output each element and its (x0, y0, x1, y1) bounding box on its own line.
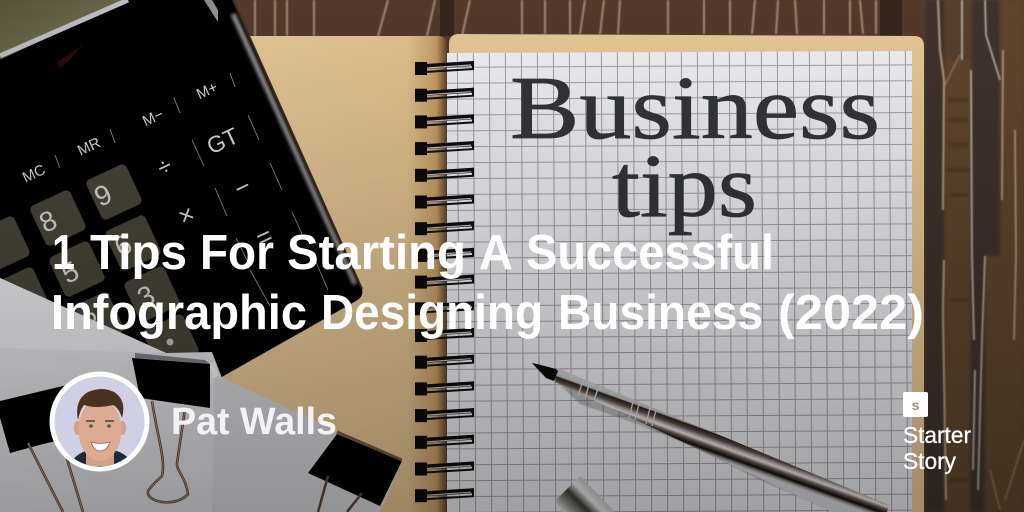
logo wordmark: Starter (903, 422, 971, 448)
calculator key legends: − (229, 170, 255, 204)
logo wordmark: Story (903, 448, 956, 474)
white paper sheets (0, 278, 402, 512)
binder clip: centre (132, 353, 210, 502)
calculator key legends: 9 (89, 178, 117, 213)
olive surface behind calculator (0, 0, 122, 54)
calculator key legends: GT (203, 122, 243, 159)
spiral binding (415, 61, 473, 502)
title: Starting (287, 226, 466, 280)
calculator keys (0, 163, 200, 371)
fountain pen (532, 363, 889, 512)
calculator key legends: 6 (109, 228, 137, 263)
right wooden notebook cover (449, 34, 924, 512)
calculator key legends: 5 (56, 255, 84, 290)
binder clip: right (308, 432, 402, 512)
title: Tips (90, 226, 187, 280)
logo wordmark (903, 422, 971, 474)
calculator key legends: × (173, 198, 199, 232)
title: For (200, 226, 274, 280)
calculator key legends: ÷ (153, 152, 177, 182)
calculator key legends: M+ (194, 79, 221, 103)
author avatar (50, 372, 150, 472)
title: Successful (526, 226, 774, 280)
calculator key legends: M− (140, 106, 167, 130)
printed heading on notebook (510, 59, 880, 236)
calculator key legends: 3 (132, 279, 160, 314)
calculator key legends: 2 (78, 305, 106, 340)
title: (2022) (778, 286, 924, 340)
author name: Pat Walls (171, 401, 337, 443)
calculator key legends: MR (75, 134, 103, 160)
title: 1 (52, 226, 75, 280)
title (51, 226, 924, 340)
title: Business (558, 286, 763, 340)
calculator key legends: = (251, 220, 277, 254)
binder clip: left (0, 385, 83, 512)
calculator key legends: MC (20, 161, 48, 187)
calculator key legends: 8 (34, 204, 62, 239)
graph paper page (447, 51, 912, 512)
title: Designing (321, 286, 543, 340)
printed heading on notebook: Business (510, 59, 880, 158)
printed heading on notebook: tips (612, 137, 757, 236)
calculator (0, 0, 362, 378)
left wooden notebook cover (180, 36, 447, 512)
title: A (479, 226, 513, 280)
logo mark: s (912, 397, 920, 413)
Starter Story logo (903, 392, 971, 474)
title: Infographic (51, 286, 307, 340)
calculator key legends (20, 79, 277, 346)
pen cap (555, 476, 615, 512)
